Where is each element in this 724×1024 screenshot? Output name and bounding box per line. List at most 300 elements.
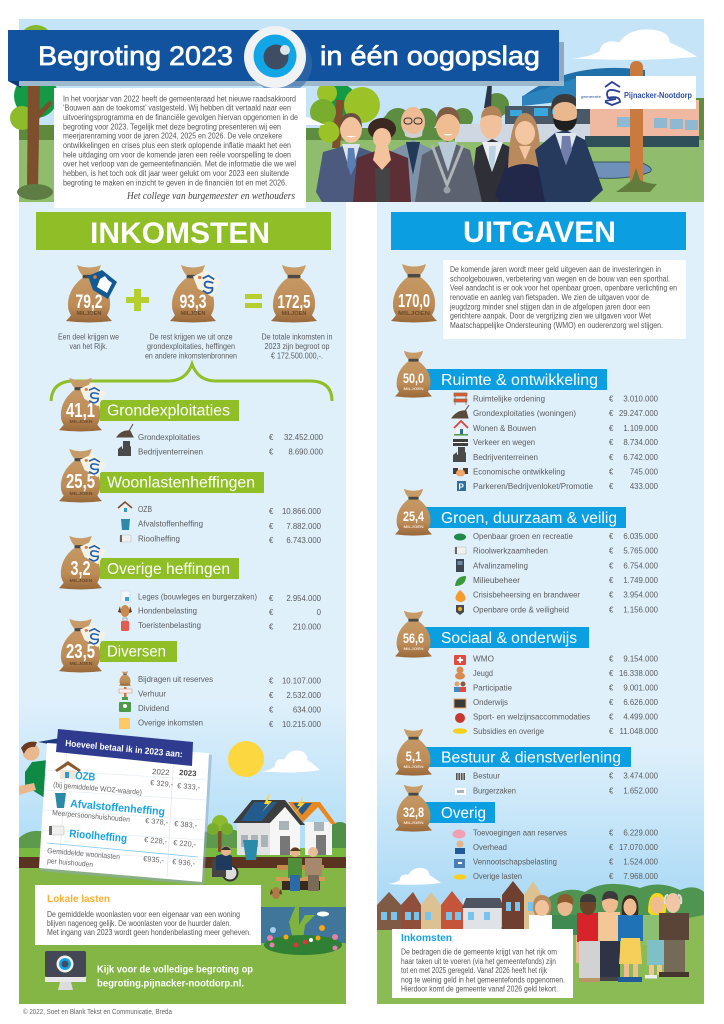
row: Afvalstoffenheffing: Afvalstoffenheffing xyxy=(70,798,165,818)
heading: INKOMSTEN xyxy=(36,212,331,250)
equals sign xyxy=(245,294,262,308)
row: Toevoegingen aan reserves xyxy=(452,829,659,838)
row: Dividend: Dividend xyxy=(138,704,169,713)
plus sign xyxy=(126,289,149,311)
section: Groen, duurzaam & veilig: Groen, duurzaam & veilig xyxy=(441,510,617,527)
row: Openbaar groen: Openbaar groen en recreatie xyxy=(473,532,573,541)
row: Gemiddelde woonlasten: € 936,- xyxy=(172,857,196,868)
row: Afvalstoffenheffing: 7.882.000 xyxy=(286,522,322,531)
row: Afvalinzameling xyxy=(456,559,659,572)
callout: Lokale lasten: Lokale lasten xyxy=(47,893,110,905)
callout: Lokale lasten: De gemiddelde woonlasten voor een eigenaar van een woning xyxy=(47,910,240,919)
trees xyxy=(545,884,704,925)
row: Bestuur xyxy=(456,772,659,781)
row: Onderwijs: € xyxy=(609,698,614,707)
copyright: © 2022, Soet en Blank Tekst en Communicatie, Breda xyxy=(23,1008,172,1016)
section: Groen, duurzaam & veilig: MILJOEN xyxy=(404,525,424,529)
row: Bedrijventerreinen: 8.690.000 xyxy=(288,448,324,456)
row: Jeugd: Jeugd xyxy=(473,669,493,678)
row: Onderwijs: Onderwijs xyxy=(473,698,508,707)
intro text block: meerjarenraming voor de jaren 2024, 2025 en 2026. De vele onzekere xyxy=(63,132,282,141)
title banner: in één oogopslag xyxy=(320,41,540,71)
income bag: Rijk 79,2: MILJOEN xyxy=(76,311,102,317)
row: OZB: OZB xyxy=(138,505,152,514)
intro text block: In het voorjaar van 2022 heeft de gemeenteraad het nieuwe raadsakkoord xyxy=(63,94,296,103)
year 2023: 2023 xyxy=(179,768,197,778)
callout: Lokale lasten: Met ingang van 2023 wordt geen hondenbelasting meer geheven. xyxy=(47,928,251,937)
row: Afvalinzameling: Afvalinzameling xyxy=(473,562,528,571)
section: Diversen: 23,5 xyxy=(66,641,95,663)
row: Crisisbeheersing xyxy=(456,590,659,602)
row: Openbare orde xyxy=(456,605,659,615)
row: WMO: WMO xyxy=(473,655,494,664)
cloud top right xyxy=(572,29,697,60)
section: Bestuur & dienstverlening xyxy=(395,729,631,776)
row: Dividend xyxy=(119,702,322,714)
text block: uitgaven intro xyxy=(443,260,686,339)
row: Jeugd: 16.338.000 xyxy=(619,669,659,678)
row: Participatie: 9.001.000 xyxy=(623,684,659,693)
row: OZB: € 329,- xyxy=(150,778,174,789)
row: OZB xyxy=(53,770,201,797)
row: Ruimtelijke ordening: 3.010.000 xyxy=(623,395,659,404)
intro text block: begroting voor 2023. Tegelijk met deze begroting presenteren wij een xyxy=(63,122,281,131)
icon: eye xyxy=(244,26,312,94)
panel: paper with rates xyxy=(39,729,212,885)
row: Rioolwerkzaamheden: € xyxy=(609,547,614,556)
trees left xyxy=(10,25,58,200)
row: Openbaar groen: € xyxy=(609,532,614,541)
section: Overig: MILJOEN xyxy=(404,821,424,825)
row: Grondexploitaties: 32.452.000 xyxy=(284,433,324,442)
row: Rioolheffing xyxy=(69,828,197,849)
income bag: totaal 172,5 xyxy=(271,265,317,323)
flower bed xyxy=(264,905,342,955)
row: Rioolwerkzaamheden: 5.765.000 xyxy=(623,547,659,556)
row: WMO: 9.154.000 xyxy=(623,655,659,664)
section: Grondexploitaties: Grondexploitaties xyxy=(107,402,230,420)
row: Overige lasten: 7.968.000 xyxy=(623,872,659,881)
income bag: gemeente 93,3: 93,3 xyxy=(180,292,206,313)
row: Bedrijventerreinen xyxy=(453,447,659,462)
section: Diversen: Diversen xyxy=(107,644,166,660)
row: Afvalstoffenheffing xyxy=(52,798,198,830)
row: Gemiddelde woonlasten: per huishouden xyxy=(47,856,93,869)
row: Afvalstoffenheffing: Afvalstoffenheffing xyxy=(138,520,203,528)
years: 2022 xyxy=(152,767,170,777)
row: Bedrijventerreinen: € xyxy=(609,453,614,462)
row: Afvalinzameling: € xyxy=(609,562,614,571)
row: Bedrijventerreinen: 6.742.000 xyxy=(623,453,659,462)
callout: Lokale lasten xyxy=(35,885,261,945)
caption: totaal: 2023 zijn begroot op xyxy=(264,342,330,351)
intro text block: ‘Bouwen aan de toekomst’ vastgesteld. Wij hebben dit vertaald naar een xyxy=(63,104,291,113)
income bag: gemeente 93,3 xyxy=(170,265,221,323)
section: Woonlastenheffingen: Woonlastenheffingen xyxy=(107,474,255,492)
row: Bedrijventerreinen: Bedrijventerreinen xyxy=(138,448,203,456)
section: Diversen xyxy=(59,619,177,673)
section: Overig: 32,8 xyxy=(403,804,424,820)
row: Bedrijventerreinen: € xyxy=(269,448,274,456)
row: WMO: € xyxy=(609,655,614,664)
panel: header illustration xyxy=(10,19,704,202)
resident 5 xyxy=(618,895,643,982)
income bag: gemeente 93,3: MILJOEN xyxy=(180,311,206,317)
section: Bestuur & dienstverlening: MILJOEN xyxy=(404,765,424,769)
row: Grondexploitaties: € xyxy=(269,433,274,442)
row: Leges: 2.954.000 xyxy=(286,594,322,603)
intro text block: hebben, is het toch ook dit jaar weer gelukt om voor 2023 een sluitende xyxy=(63,169,289,178)
row: Bijdragen uit reserves: Bijdragen uit reserves xyxy=(138,675,213,684)
callout: Inkomsten: tot en met 2025 geregeld. Vanaf 2026 heeft het rijk xyxy=(401,966,547,975)
row: Afvalstoffenheffing: Meerpersoonshuishouden xyxy=(52,808,130,824)
background hedges xyxy=(306,93,704,141)
section: Sociaal & onderwijs: 56,6 xyxy=(403,630,424,646)
row: Sport: € xyxy=(609,713,614,722)
row: Verhuur: € xyxy=(269,691,274,700)
sign post xyxy=(630,61,643,191)
row: Wonen & Bouwen: 1.109.000 xyxy=(623,424,659,433)
row: Afvalstoffenheffing: € xyxy=(269,522,274,531)
row of houses xyxy=(377,881,542,930)
person 3 xyxy=(390,107,437,202)
resident 2 xyxy=(552,894,580,963)
income bag: Rijk 79,2 xyxy=(66,265,117,323)
callout: Inkomsten: nog te weinig geld in het gemeentefonds opgenomen. xyxy=(401,976,565,984)
row: Bedrijventerreinen: Bedrijventerreinen xyxy=(473,453,538,462)
row: Toeristenbelasting xyxy=(121,618,322,632)
bag: uitgaven 170,0: 170,0 xyxy=(398,291,430,311)
row: Rioolheffing: Rioolheffing xyxy=(138,534,180,544)
row: Ruimtelijke ordening: € xyxy=(609,395,614,404)
icon: monitor with eye xyxy=(45,951,86,990)
houses with solar panels xyxy=(233,792,336,855)
bottom-right landscape xyxy=(377,868,704,1004)
row: Grondexploitaties: Grondexploitaties xyxy=(138,433,200,442)
row: Crisisbeheersing: € xyxy=(609,591,614,600)
icon: container xyxy=(55,793,66,808)
row: Onderwijs xyxy=(454,698,659,708)
row: Openbaar groen xyxy=(454,532,659,541)
icon: pipe xyxy=(49,826,64,835)
income bag: totaal 172,5: 172,5 xyxy=(278,292,310,312)
row: Bijdragen uit reserves xyxy=(119,671,322,686)
row: Vennootschapsbelasting: € xyxy=(609,858,614,867)
person 6 xyxy=(495,113,555,202)
panel: left column background xyxy=(19,202,346,1004)
row: Milieubeheer xyxy=(455,576,659,586)
town hall building xyxy=(455,68,699,147)
section: Sociaal & onderwijs: MILJOEN xyxy=(404,647,424,651)
row: Jeugd xyxy=(455,666,659,680)
link text xyxy=(97,964,253,990)
row: Rioolheffing xyxy=(120,534,322,545)
row: Gemiddelde woonlasten: €935,- xyxy=(143,854,165,865)
row: Hondenbelasting xyxy=(118,605,322,617)
text block: uitgaven intro: Veel aandacht is er ook voor het openbaar groen, openbare verlichting en xyxy=(450,284,677,293)
row: WMO xyxy=(454,655,659,665)
row: Parkeren: € xyxy=(609,482,614,491)
row: OZB: € xyxy=(269,507,274,516)
row: Subsidies: Subsidies en overige xyxy=(473,727,544,736)
row: Burgerzaken: € xyxy=(609,787,614,796)
row: OZB: € 333,- xyxy=(177,781,201,792)
title banner: Begroting 2023 xyxy=(38,41,233,71)
intro text block: Het college van burgemeester en wethouders xyxy=(126,191,295,202)
row: Parkeren: 433.000 xyxy=(630,482,659,491)
row: Subsidies: 11.048.000 xyxy=(620,727,659,736)
row: Jeugd: € xyxy=(609,669,614,678)
callout: Inkomsten: Inkomsten xyxy=(401,933,452,944)
person on bench: green shirt xyxy=(288,847,302,891)
banner: Hoeveel betaal xyxy=(56,729,193,766)
section: Overige heffingen xyxy=(59,536,239,590)
row: Rioolheffing: € 220,- xyxy=(173,838,197,849)
row: Grondexploitaties xyxy=(117,424,324,442)
flag xyxy=(484,82,492,108)
row: Sport: 4.499.000 xyxy=(623,713,659,722)
row: Gemiddelde woonlasten: Gemiddelde woonlasten xyxy=(47,846,120,861)
row: Overige lasten xyxy=(454,872,659,881)
callout: Inkomsten: De bedragen die de gemeente krijgt van het rijk om xyxy=(401,948,557,956)
row: Verhuur: 2.532.000 xyxy=(286,691,322,700)
row: Overige lasten: € xyxy=(609,872,614,881)
row: Afvalinzameling: 6.754.000 xyxy=(623,562,659,571)
person 1 xyxy=(316,113,372,202)
row: Milieubeheer: 1.749.000 xyxy=(623,576,659,585)
row: Crisisbeheersing: 3.954.000 xyxy=(623,591,659,600)
row: Overhead xyxy=(455,840,659,854)
wheelchair person xyxy=(212,846,238,880)
row: Openbare orde: 1.156.000 xyxy=(623,606,659,615)
panel: right column background xyxy=(377,202,704,1004)
row: Subsidies: € xyxy=(609,727,614,736)
row: Wonen & Bouwen: € xyxy=(609,424,614,433)
row: Overige inkomsten: Overige inkomsten xyxy=(138,718,203,728)
heading: UITGAVEN xyxy=(391,212,686,250)
ground xyxy=(377,915,704,1004)
row: Milieubeheer: Milieubeheer xyxy=(473,576,520,585)
section: Ruimte & ontwikkeling: 50,0 xyxy=(403,370,424,386)
row: Economische ontwikkeling xyxy=(453,468,659,477)
intro text block: hele uitdaging om voor de komende jaren een reële voorspelling te doen xyxy=(63,150,291,159)
row: Bestuur: Bestuur xyxy=(473,772,500,781)
row: Dividend: 634.000 xyxy=(293,706,322,714)
cloud xyxy=(388,868,441,885)
section: Bestuur & dienstverlening: Bestuur & dienstverlening xyxy=(441,750,621,766)
resident 7 xyxy=(659,893,689,977)
logo sign: gemeente xyxy=(581,95,601,99)
text block: uitgaven intro: Maatschappelijke Ondersteuning (WMO) en ouderenzorg wel stijgen. xyxy=(450,321,663,330)
person 7 xyxy=(535,94,603,202)
row: Bestuur: 3.474.000 xyxy=(623,772,659,781)
sun xyxy=(228,741,264,777)
row: Burgerzaken xyxy=(455,787,659,796)
pond xyxy=(590,162,651,178)
row: Grondexploitaties (woningen): Grondexploitaties (woningen) xyxy=(473,409,576,418)
resident 4 xyxy=(598,891,620,981)
callout: Inkomsten xyxy=(392,929,573,998)
row: OZB: (bij gemiddelde WOZ-waarde) xyxy=(53,780,142,797)
row: Participatie: € xyxy=(609,684,614,693)
row: Grondexploitaties (woningen): 29.247.000 xyxy=(619,409,659,418)
text block: uitgaven intro: schoolgebouwen, verbetering van wegen en de bouw van een sporthal. xyxy=(450,274,670,283)
row: Vennootschapsbelasting xyxy=(454,858,659,868)
row: Rioolheffing: € xyxy=(269,536,274,545)
row: Overige inkomsten: € xyxy=(269,720,274,729)
brace xyxy=(51,364,332,401)
callout: Inkomsten: haar taken uit te voeren (via het gemeentefonds) zijn xyxy=(401,957,556,966)
row: Rioolheffing: 6.743.000 xyxy=(286,536,322,545)
row: OZB: OZB xyxy=(75,770,96,784)
person 5 xyxy=(470,106,515,202)
row: Hondenbelasting: Hondenbelasting xyxy=(138,606,197,616)
row: Openbaar groen: 6.035.000 xyxy=(623,532,659,541)
pond with swan xyxy=(261,907,346,943)
row: Bijdragen uit reserves: € xyxy=(269,676,274,686)
row: Toeristenbelasting: € xyxy=(269,622,274,632)
row: Verhuur: Verhuur xyxy=(138,690,166,698)
plant at post xyxy=(616,168,657,192)
bag: uitgaven 170,0 xyxy=(391,264,437,322)
bottom-left landscape xyxy=(19,741,346,1004)
resident 6 xyxy=(643,893,667,978)
row: Ruimtelijke ordening: Ruimtelijke ordening xyxy=(473,395,545,404)
row: Afvalstoffenheffing xyxy=(121,519,322,531)
row: Overige lasten: Overige lasten xyxy=(473,872,522,881)
caption: totaal: De totale inkomsten in xyxy=(262,332,332,342)
bag: uitgaven 170,0: MILJOEN xyxy=(398,311,430,317)
callout: Inkomsten: Hierdoor komt de gemeente vanaf 2026 geld tekort. xyxy=(401,984,558,994)
row: Hondenbelasting: € xyxy=(269,608,274,617)
row: Openbare orde: € xyxy=(609,606,614,615)
row: Vennootschapsbelasting: Vennootschapsbelasting xyxy=(473,858,557,867)
row: Parkeren: Parkeren/Bedrijvenloket/Promotie xyxy=(473,482,593,491)
row: Vennootschapsbelasting: 1.524.000 xyxy=(623,858,659,867)
row: Bedrijventerreinen xyxy=(118,441,324,456)
person 4 mayor xyxy=(415,107,482,202)
row: Verhuur xyxy=(119,687,322,700)
row: Burgerzaken: Burgerzaken xyxy=(473,787,516,796)
logo sign xyxy=(576,76,696,109)
bench with people xyxy=(276,847,325,891)
section: Bestuur & dienstverlening: 5,1 xyxy=(406,748,422,764)
icon: house xyxy=(55,761,81,779)
row: Dividend: € xyxy=(269,706,274,714)
row: Grondexploitaties (woningen) xyxy=(452,405,659,418)
row: Overhead: € xyxy=(609,843,614,852)
row: Sport xyxy=(455,713,659,723)
caption: rest: en andere inkomstenbronnen xyxy=(145,352,237,360)
row: Wonen & Bouwen: Wonen & Bouwen xyxy=(473,424,536,433)
row: Bijdragen uit reserves: 10.107.000 xyxy=(282,676,322,686)
section: Woonlastenheffingen: MILJOEN xyxy=(70,491,92,496)
row: Onderwijs: 6.626.000 xyxy=(623,698,659,707)
banner: Hoeveel betaal: Hoeveel betaal ik in 2023 aan: xyxy=(65,738,183,759)
row: OZB xyxy=(118,502,322,516)
row: Grondexploitaties (woningen): € xyxy=(609,409,614,418)
section: Grondexploitaties: MILJOEN xyxy=(70,419,92,424)
section: Sociaal & onderwijs xyxy=(395,611,589,658)
heading: UITGAVEN: UITGAVEN xyxy=(463,216,616,249)
caption: Rijk: van het Rijk. xyxy=(70,342,108,351)
row: Verkeer en wegen: Verkeer en wegen xyxy=(473,438,535,447)
row: Toeristenbelasting: 210.000 xyxy=(293,622,322,632)
section: Groen, duurzaam & veilig xyxy=(395,489,626,536)
section: Groen, duurzaam & veilig: 25,4 xyxy=(403,508,424,524)
section: Overig xyxy=(395,785,495,832)
row: Ruimtelijke ordening xyxy=(454,393,659,405)
cloud xyxy=(262,750,320,772)
row: Subsidies xyxy=(453,727,659,736)
row: Toevoegingen aan reserves: Toevoegingen aan reserves xyxy=(473,829,567,838)
row: Verkeer en wegen xyxy=(453,438,659,447)
row: Leges: € xyxy=(269,594,274,603)
logo mark xyxy=(605,82,620,105)
caption: Rijk xyxy=(58,332,119,351)
link text: begroting.pijnacker-nootdorp.nl. xyxy=(97,978,244,990)
section: Grondexploitaties xyxy=(59,378,239,432)
resident 3 xyxy=(577,894,603,982)
row: Parkeren xyxy=(457,481,659,492)
link text: Kijk voor de volledige begroting op xyxy=(97,964,253,976)
row: Milieubeheer: € xyxy=(609,576,614,585)
row: Openbare orde: Openbare orde & veiligheid xyxy=(473,606,569,615)
row: Verkeer en wegen: € xyxy=(609,438,614,447)
person holding paper xyxy=(19,738,60,800)
text block: uitgaven intro: De komende jaren wordt meer geld uitgeven aan de investeringen in xyxy=(450,265,661,274)
row: Wonen & Bouwen xyxy=(454,421,659,436)
section: Overige heffingen: 3,2 xyxy=(70,558,90,580)
row: Overhead: 17.070.000 xyxy=(619,843,659,852)
row: OZB: 10.866.000 xyxy=(282,507,322,516)
bin xyxy=(243,840,258,860)
section: Woonlastenheffingen: 25,5 xyxy=(66,471,95,493)
section: Diversen: MILJOEN xyxy=(70,661,92,666)
row: Toeristenbelasting: Toeristenbelasting xyxy=(138,621,201,630)
section: Woonlastenheffingen xyxy=(59,449,264,503)
group of residents xyxy=(529,891,689,982)
intro text block: over het verloop van de gemeentefinanciën. Met de informatie die we wel xyxy=(63,160,296,169)
intro text block: uitvoeringsprogramma en de financiële gevolgen hiervan opgenomen in de xyxy=(63,113,298,122)
row: Overige inkomsten: 10.215.000 xyxy=(282,720,322,729)
row: Rioolwerkzaamheden xyxy=(455,547,659,556)
row: Sport: Sport- en welzijnsaccommodaties xyxy=(473,713,590,722)
intro text block xyxy=(54,88,325,208)
small tree xyxy=(207,815,233,852)
section: Overige heffingen: MILJOEN xyxy=(70,578,92,583)
row: Hondenbelasting: 0 xyxy=(317,608,322,617)
income bag: totaal 172,5: MILJOEN xyxy=(282,311,307,317)
caption: rest: grondexploitaties, heffingen xyxy=(147,342,235,351)
section: Sociaal & onderwijs: Sociaal & onderwijs xyxy=(441,630,577,647)
person 2 xyxy=(353,118,411,202)
section: Overig: Overig xyxy=(441,805,486,822)
resident 1 xyxy=(529,895,555,935)
row: Parkeren: P xyxy=(458,482,464,492)
row: Rioolheffing: Rioolheffing xyxy=(69,828,128,845)
text block: uitgaven intro: jeugdzorg minder snel stijgen dan in de afgelopen jaren door een xyxy=(449,302,650,311)
title banner xyxy=(8,30,564,88)
logo sign: Pijnacker-Nootdorp xyxy=(624,91,692,100)
income bag: Rijk 79,2: 79,2 xyxy=(76,292,102,313)
text block: uitgaven intro: renovatie en aanleg van fietspaden. We zien de uitgaven voor de xyxy=(450,293,649,302)
callout: Lokale lasten: blijven nagenoeg gelijk. De woonlasten voor de huurder dalen. xyxy=(47,919,231,928)
row: Burgerzaken: 1.652.000 xyxy=(623,787,659,796)
row: Economische ontwikkeling: € xyxy=(609,468,614,477)
row: Toevoegingen aan reserves: 6.229.000 xyxy=(623,829,659,838)
row: Economische ontwikkeling: Economische ontwikkeling xyxy=(473,468,565,477)
